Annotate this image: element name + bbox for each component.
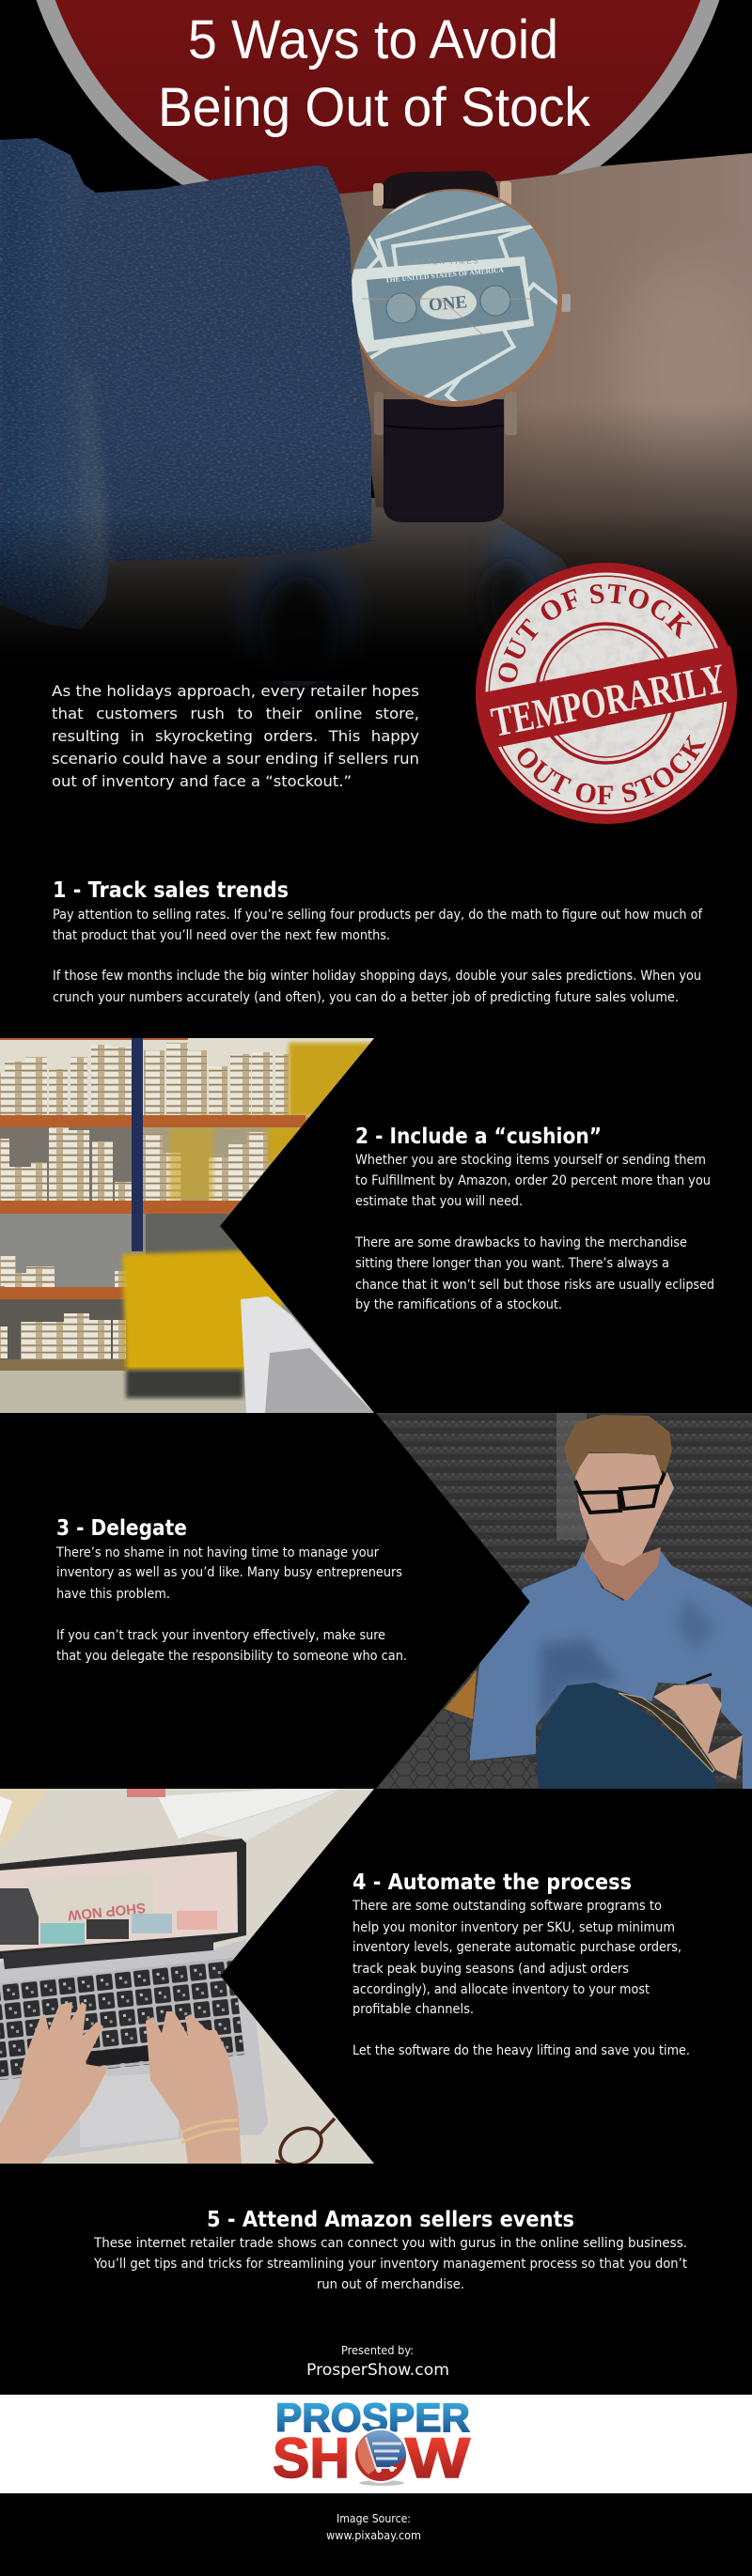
section 1 heading: 1 - Track sales trends — [53, 877, 289, 903]
section 2 photo: warehouse — [0, 1038, 376, 1414]
title badge — [16, 0, 740, 242]
section 1 body — [53, 908, 703, 1005]
trackpad — [80, 2072, 179, 2148]
blurred backdrop under the arm — [0, 498, 752, 688]
boxes middle shelf — [0, 1127, 268, 1201]
section 4 body: There are some outstanding software programs to — [352, 1899, 662, 1914]
section 3 body: have this problem. — [56, 1587, 170, 1602]
bracelets — [179, 2120, 239, 2143]
section 1 body: crunch your numbers accurately (and often), you can do a better job of predicting future sales volume. — [53, 990, 679, 1005]
section 3 heading: 3 - Delegate — [56, 1514, 187, 1541]
section 2 body — [354, 1153, 714, 1312]
section 5 body: You’ll get tips and tricks for streamlining your inventory management process so that you don’t — [93, 2257, 687, 2272]
pallet — [0, 1359, 126, 1371]
sweater sleeve — [0, 132, 376, 639]
intro paragraph: that customers rush to their online store, — [52, 705, 419, 722]
section 5 heading: 5 - Attend Amazon sellers events — [207, 2206, 574, 2232]
seat — [376, 1667, 545, 1789]
logo word show: O — [355, 2427, 406, 2490]
keyboard — [0, 1958, 244, 2080]
logo word show: W — [405, 2427, 470, 2490]
title: 5 Ways to Avoid — [188, 9, 558, 70]
intro paragraph: out of inventory and face a “stockout.” — [52, 772, 352, 790]
screen headline: SHOP NOW — [66, 1900, 147, 1923]
back wall middle shelf — [0, 1127, 141, 1203]
section 3 body: There’s no shame in not having time to manage your — [55, 1545, 379, 1560]
intro paragraph: scenario could have a sour ending if sellers run — [52, 750, 419, 768]
central dollar bill — [350, 256, 534, 352]
shirt shading — [540, 1639, 620, 1724]
section 4 heading: 4 - Automate the process — [352, 1869, 632, 1895]
papers — [158, 1789, 338, 1839]
glasses — [575, 1473, 665, 1513]
hero photo: wrist with watch — [0, 130, 752, 688]
watch lugs — [373, 181, 517, 435]
section 4 body: inventory levels, generate automatic purchase orders, — [352, 1940, 682, 1955]
fade to black — [0, 512, 752, 681]
logo globe with cart — [353, 2429, 408, 2486]
intro paragraph: resulting in skyrocketing orders. This happy — [52, 727, 419, 745]
website: ProsperShow.com — [306, 2361, 449, 2380]
pen — [686, 1674, 712, 1684]
forklift body — [122, 1250, 282, 1372]
back wall top shelf — [0, 1038, 376, 1117]
section 2 heading: 2 - Include a “cushion” — [355, 1123, 602, 1149]
notebook on desk — [0, 1789, 50, 1848]
section 5 body: These internet retailer trade shows can connect you with gurus in the online selling business. — [93, 2236, 687, 2251]
logo word show: SH — [273, 2427, 350, 2490]
watch face: dollar bills — [352, 191, 557, 401]
bill denomination: ONE — [428, 292, 468, 316]
section 4 body: Let the software do the heavy lifting and save you time. — [352, 2043, 690, 2058]
section 3 body: that you delegate the responsibility to someone who can. — [56, 1649, 407, 1664]
right hand — [146, 2011, 242, 2165]
strap seam — [384, 426, 504, 428]
watch case — [350, 189, 562, 407]
stamp arc text top: OUT OF STOCK — [498, 584, 692, 682]
boxes top shelf — [0, 1043, 289, 1116]
hinge — [3, 1937, 213, 1969]
stamp arc text bottom: OUT OF STOCK — [517, 735, 706, 804]
watch strap top — [383, 171, 498, 209]
section 2 body: estimate that you will need. — [355, 1194, 523, 1209]
orange cushion — [445, 1669, 477, 1719]
logo band — [0, 2395, 752, 2493]
title — [158, 9, 591, 138]
left hand — [0, 2002, 108, 2165]
section 3 photo: man writing — [376, 1413, 752, 1789]
bill text: THE UNITED STATES OF AMERICA — [384, 265, 505, 285]
shrink-wrapped pallet — [241, 1296, 374, 1413]
title: Being Out of Stock — [158, 77, 591, 138]
logo word prosper: PROSPER — [275, 2396, 470, 2441]
watch strap bottom — [384, 399, 504, 522]
image source label: Image Source: — [337, 2512, 411, 2525]
section 2 body: chance that it won’t sell but those risks are usually eclipsed — [355, 1278, 714, 1293]
lower wall — [146, 1214, 240, 1255]
boxes lower shelves — [0, 1256, 132, 1359]
section 4 body: accordingly), and allocate inventory to your most — [352, 1982, 650, 1997]
watch brand: BETTER TIMES — [408, 256, 479, 267]
section 5 body — [93, 2236, 687, 2292]
section 4 body: profitable channels. — [352, 2002, 474, 2017]
section 2 body: Whether you are stocking items yourself or sending them — [355, 1153, 706, 1168]
section 3 body: If you can’t track your inventory effectively, make sure — [56, 1628, 385, 1643]
laptop screen — [0, 1852, 238, 1951]
section 2 body: sitting there longer than you want. There’s always a — [355, 1256, 669, 1271]
image source url: www.pixabay.com — [326, 2529, 421, 2542]
spacebar — [87, 2045, 150, 2067]
forearm highlight — [616, 263, 752, 470]
section 2 body: by the ramifications of a stockout. — [355, 1297, 562, 1312]
section 4 body: track peak buying seasons (and adjust orders — [352, 1962, 629, 1977]
section 2 body: to Fulfillment by Amazon, order 20 percent more than you — [355, 1173, 711, 1188]
section 3 body: inventory as well as you’d like. Many busy entrepreneurs — [56, 1565, 402, 1580]
neck — [583, 1538, 661, 1601]
logo word show — [273, 2427, 470, 2490]
section 3 body — [55, 1545, 407, 1664]
watch crown — [561, 294, 571, 312]
shirt — [470, 1547, 752, 1789]
forearm shading — [334, 153, 752, 648]
jeans — [536, 1683, 717, 1789]
section 5 body: run out of merchandise. — [317, 2277, 464, 2292]
laptop base — [0, 1939, 268, 2161]
section 4 photo: hands on laptop — [0, 1789, 376, 2173]
prosper show logo — [273, 2396, 470, 2490]
face — [575, 1453, 674, 1566]
intro paragraph — [52, 682, 419, 790]
out of stock stamp — [476, 563, 737, 824]
hair — [564, 1415, 672, 1477]
presented by: Presented by: — [341, 2344, 414, 2357]
forearm — [334, 153, 752, 648]
laptop screen frame — [0, 1839, 246, 1959]
yellow forklift mast blur — [169, 1043, 376, 1201]
shelf beams — [0, 1038, 306, 1299]
hand — [653, 1684, 743, 1779]
floor — [0, 1370, 376, 1413]
section 1 body: Pay attention to selling rates. If you’re selling four products per day, do the math to figure out how much of — [53, 908, 703, 923]
section 1 body: that product that you’ll need over the next few months. — [53, 928, 390, 943]
watch hands — [362, 299, 550, 348]
section 4 body: help you monitor inventory per SKU, setup minimum — [352, 1920, 675, 1935]
shelf upright — [132, 1038, 143, 1251]
notebook — [619, 1693, 714, 1772]
eyeglasses — [274, 2118, 335, 2173]
section 2 body: There are some drawbacks to having the merchandise — [354, 1235, 687, 1250]
section 4 body — [352, 1899, 690, 2058]
intro paragraph: As the holidays approach, every retailer hopes — [52, 682, 419, 700]
section 1 body: If those few months include the big winter holiday shopping days, double your sales predictions. When you — [53, 969, 701, 984]
